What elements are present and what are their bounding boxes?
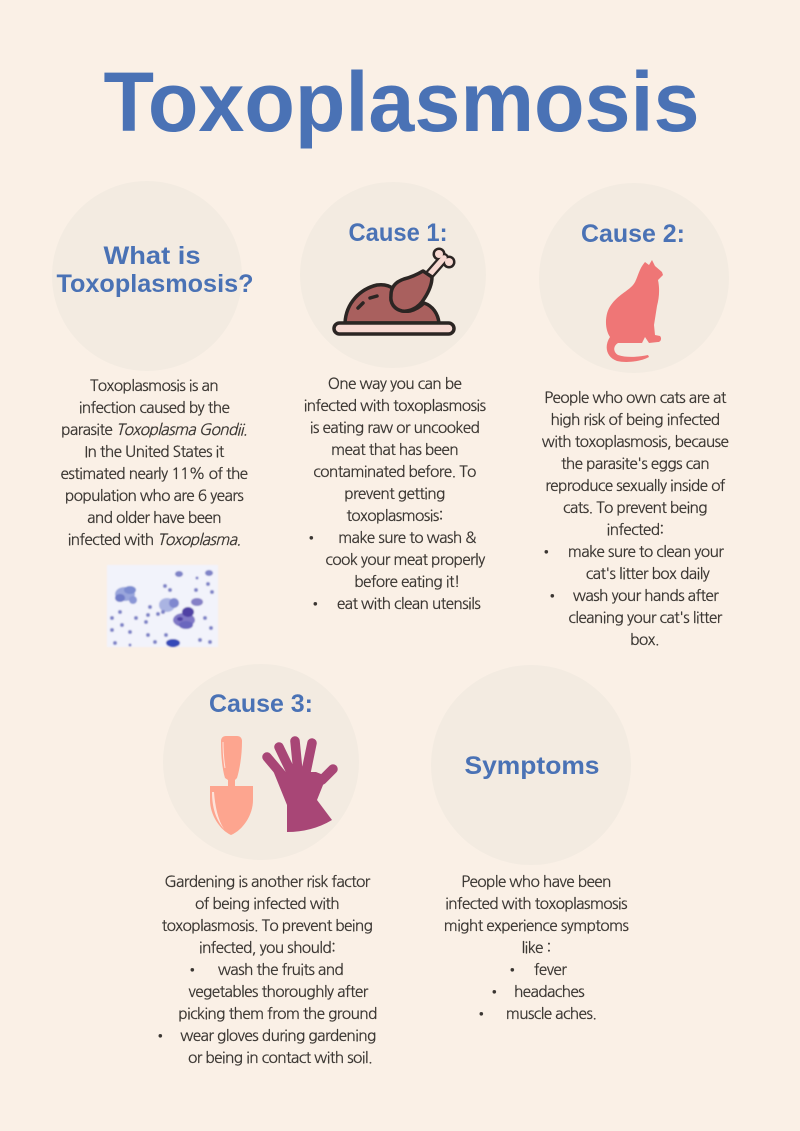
text: cause 3 description: picking them from the ground bbox=[178, 1006, 377, 1022]
heading: what is toxoplasmosis: Toxoplasmosis? bbox=[56, 270, 254, 298]
text: symptoms description: People who have been bbox=[461, 874, 611, 890]
text: cause 3 description: wash the fruits and bbox=[218, 962, 343, 978]
text: cause 2 description: box. bbox=[630, 632, 659, 648]
text: cause 2 description: cats. To prevent being bbox=[563, 500, 707, 516]
panel: cause 3 bbox=[153, 664, 377, 1066]
text: cause 3 description: vegetables thoroughly after bbox=[188, 984, 369, 1000]
panel: cause 1 bbox=[300, 182, 486, 612]
circle: symptoms bbox=[431, 665, 631, 865]
text: symptoms description: fever bbox=[534, 962, 567, 978]
text: symptoms description: • bbox=[474, 1007, 488, 1022]
text: definition: Toxoplasmosis is an bbox=[90, 378, 218, 394]
title: Toxoplasmosis bbox=[104, 55, 700, 149]
text: definition: infected with Toxoplasma. bbox=[68, 532, 240, 548]
text: cause 3 description: infected, you should: bbox=[199, 940, 335, 956]
text: cause 1 description: • bbox=[304, 531, 318, 546]
text: cause 3 description bbox=[153, 874, 377, 1066]
text: definition: population who are 6 years bbox=[65, 488, 244, 504]
text: definition: and older have been bbox=[87, 510, 221, 526]
text: definition: In the United States it bbox=[84, 444, 225, 460]
icon: cat bbox=[606, 260, 663, 362]
text: cause 1 description: meat that has been bbox=[331, 442, 458, 458]
text: cause 2 description: infected: bbox=[607, 522, 663, 538]
heading: cause 3: Cause 3: bbox=[209, 690, 313, 718]
text: cause 2 description: reproduce sexually inside of bbox=[545, 478, 726, 494]
heading: cause 1: Cause 1: bbox=[348, 219, 448, 247]
text: cause 3 description: Gardening is another risk factor bbox=[164, 874, 371, 890]
text: cause 1 description: infected with toxoplasmosis bbox=[304, 398, 486, 414]
text: cause 1 description: • bbox=[308, 597, 322, 612]
text: symptoms description: muscle aches. bbox=[506, 1006, 596, 1022]
text: cause 1 description: is eating raw or uncooked bbox=[310, 420, 479, 436]
circle: cause 3 bbox=[163, 664, 359, 860]
text: cause 3 description: of being infected with bbox=[195, 896, 339, 912]
heading: what is toxoplasmosis: What is bbox=[104, 242, 200, 270]
text: cause 2 description: • bbox=[539, 545, 553, 560]
text: symptoms description: • bbox=[487, 985, 501, 1000]
panel: symptoms bbox=[431, 665, 631, 1022]
text: definition: parasite Toxoplasma Gondii. bbox=[61, 422, 247, 438]
icon: roast turkey bbox=[334, 248, 456, 334]
text: cause 2 description: the parasite's eggs can bbox=[561, 456, 709, 472]
text: symptoms description bbox=[444, 874, 629, 1022]
text: cause 1 description: before eating it! bbox=[354, 574, 460, 590]
text: cause 2 description bbox=[539, 390, 728, 648]
text: cause 3 description: toxoplasmosis. To prevent being bbox=[162, 918, 373, 934]
panel: what is toxoplasmosis bbox=[52, 181, 254, 647]
text: cause 1 description: eat with clean utensils bbox=[337, 596, 481, 612]
text: cause 3 description: • bbox=[185, 963, 199, 978]
text: definition bbox=[61, 378, 248, 548]
text: cause 3 description: • bbox=[153, 1029, 167, 1044]
icon: trowel bbox=[210, 736, 253, 835]
text: cause 1 description: One way you can be bbox=[328, 376, 461, 392]
text: symptoms description: might experience symptoms bbox=[444, 918, 629, 934]
heading: symptoms: Symptoms bbox=[464, 752, 600, 780]
text: symptoms description: like : bbox=[521, 940, 551, 956]
text: cause 2 description: cat's litter box daily bbox=[586, 566, 710, 582]
text: cause 2 description: wash your hands after bbox=[573, 588, 719, 604]
text: cause 3 description: or being in contact with soil. bbox=[188, 1050, 372, 1066]
text: cause 1 description: contaminated before. To bbox=[313, 464, 476, 480]
text: cause 1 description: prevent getting bbox=[344, 487, 445, 502]
text: cause 1 description: make sure to wash & bbox=[338, 530, 476, 546]
text: cause 3 description: wear gloves during gardening bbox=[180, 1028, 376, 1044]
text: definition: estimated nearly 11% of the bbox=[61, 466, 248, 482]
text: cause 2 description: high risk of being infected bbox=[550, 412, 720, 428]
text: cause 1 description: toxoplasmosis: bbox=[346, 508, 443, 524]
text: cause 1 description bbox=[304, 376, 486, 612]
micrograph image bbox=[107, 565, 218, 647]
text: cause 2 description: • bbox=[545, 589, 559, 604]
circle: cause 2 bbox=[539, 183, 729, 373]
panel: cause 2 bbox=[539, 183, 729, 648]
text: symptoms description: headaches bbox=[514, 984, 585, 1000]
text: symptoms description: infected with toxoplasmosis bbox=[445, 896, 628, 912]
text: definition: infection caused by the bbox=[79, 400, 229, 416]
text: symptoms description: • bbox=[505, 963, 519, 978]
text: cause 2 description: People who own cats are at bbox=[544, 390, 727, 406]
heading: cause 2: Cause 2: bbox=[581, 220, 685, 248]
circle: what is bbox=[52, 181, 242, 371]
circle: cause 1 bbox=[300, 182, 486, 368]
text: cause 1 description: cook your meat properly bbox=[325, 552, 485, 568]
text: cause 2 description: make sure to clean your bbox=[568, 544, 724, 560]
heading: what is toxoplasmosis bbox=[56, 242, 254, 298]
text: cause 2 description: cleaning your cat's litter bbox=[568, 610, 723, 626]
icon: gardening glove bbox=[267, 741, 333, 832]
text: cause 2 description: with toxoplasmosis, because bbox=[542, 434, 728, 450]
